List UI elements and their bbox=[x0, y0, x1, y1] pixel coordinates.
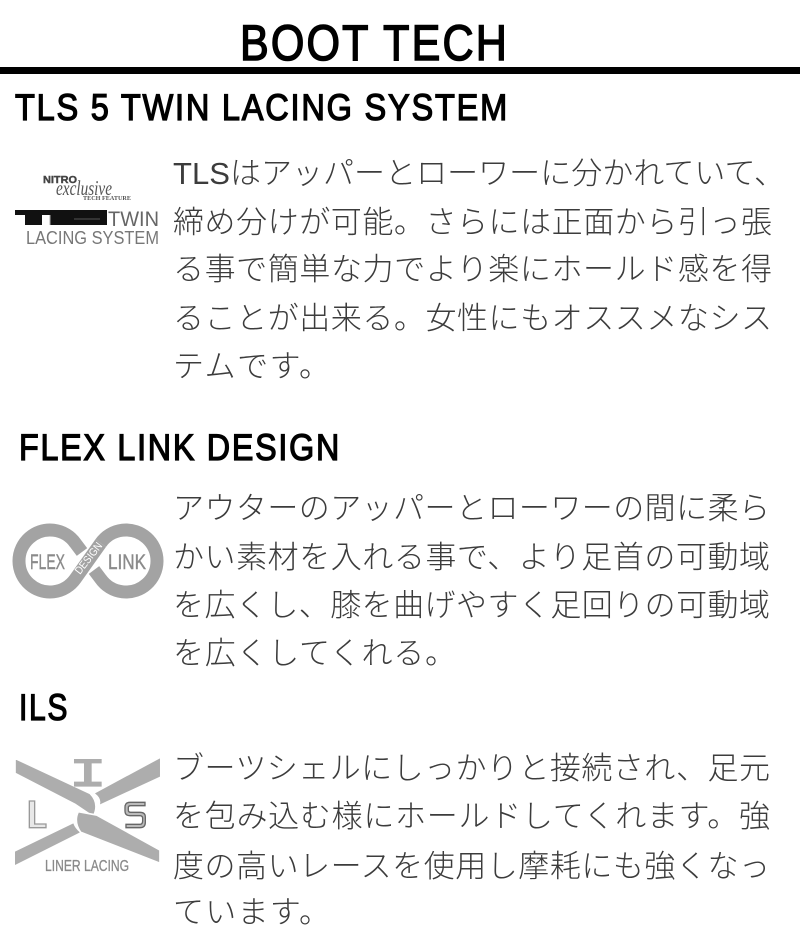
icon: ILS liner lacing logo: LINER LACING bbox=[45, 858, 129, 875]
text block: ILS description: ブーツシェルにしっかりと接続され、足元 bbox=[173, 751, 770, 786]
text block: TLS description: TLSはアッパーとローワーに分かれていて、 bbox=[173, 156, 785, 191]
heading: Flex Link Design: FLEX LINK DESIGN bbox=[19, 427, 341, 468]
heading: TLS 5: TLS 5 TWIN LACING SYSTEM bbox=[15, 87, 509, 128]
text block: TLS description: テムです。 bbox=[173, 349, 330, 384]
heading: ILS: ILS bbox=[19, 687, 69, 728]
text block: Flex Link description bbox=[173, 491, 770, 671]
icon: Flex Link infinity logo: FLEX bbox=[30, 551, 65, 574]
text block: TLS description bbox=[173, 156, 785, 384]
text block: Flex Link description: アウターのアッパーとローワーの間に柔ら bbox=[173, 491, 770, 526]
text block: ILS description bbox=[173, 751, 770, 930]
text block: Flex Link description: を広くしてくれる。 bbox=[173, 636, 456, 671]
text block: Flex Link description: かい素材を入れる事で、より足首の可動域 bbox=[173, 540, 770, 575]
icon: TLS logo bbox=[15, 174, 159, 248]
text block: ILS description: ています。 bbox=[173, 895, 330, 930]
icon: Flex Link infinity logo: LINK bbox=[108, 551, 146, 574]
icon: TLS logo: TWIN bbox=[108, 208, 159, 231]
icon: TLS logo: NITRO bbox=[43, 174, 77, 186]
text block: TLS description: る事で簡単な力でより楽にホールド感を得 bbox=[173, 252, 772, 287]
text block: TLS description: ることが出来る。女性にもオススメなシス bbox=[173, 301, 772, 336]
text block: Flex Link description: を広くし、膝を曲げやすく足回りの可動域 bbox=[173, 588, 770, 623]
title: BOOT TECH bbox=[240, 15, 509, 71]
icon: TLS logo: exclusive bbox=[56, 176, 112, 200]
icon: Flex Link infinity logo bbox=[19, 530, 157, 592]
icon: Flex Link infinity logo: DESIGN bbox=[73, 540, 105, 577]
icon: TLS logo: LACING SYSTEM bbox=[26, 228, 159, 248]
text block: ILS description: を包み込む様にホールドしてくれます。強 bbox=[173, 799, 770, 834]
icon: TLS logo: TECH FEATURE bbox=[83, 195, 131, 202]
text block: TLS description: 締め分けが可能。さらには正面から引っ張 bbox=[173, 205, 772, 240]
text block: ILS description: 度の高いレースを使用し摩耗にも強くなっ bbox=[173, 849, 770, 884]
icon: ILS liner lacing logo bbox=[15, 758, 160, 875]
